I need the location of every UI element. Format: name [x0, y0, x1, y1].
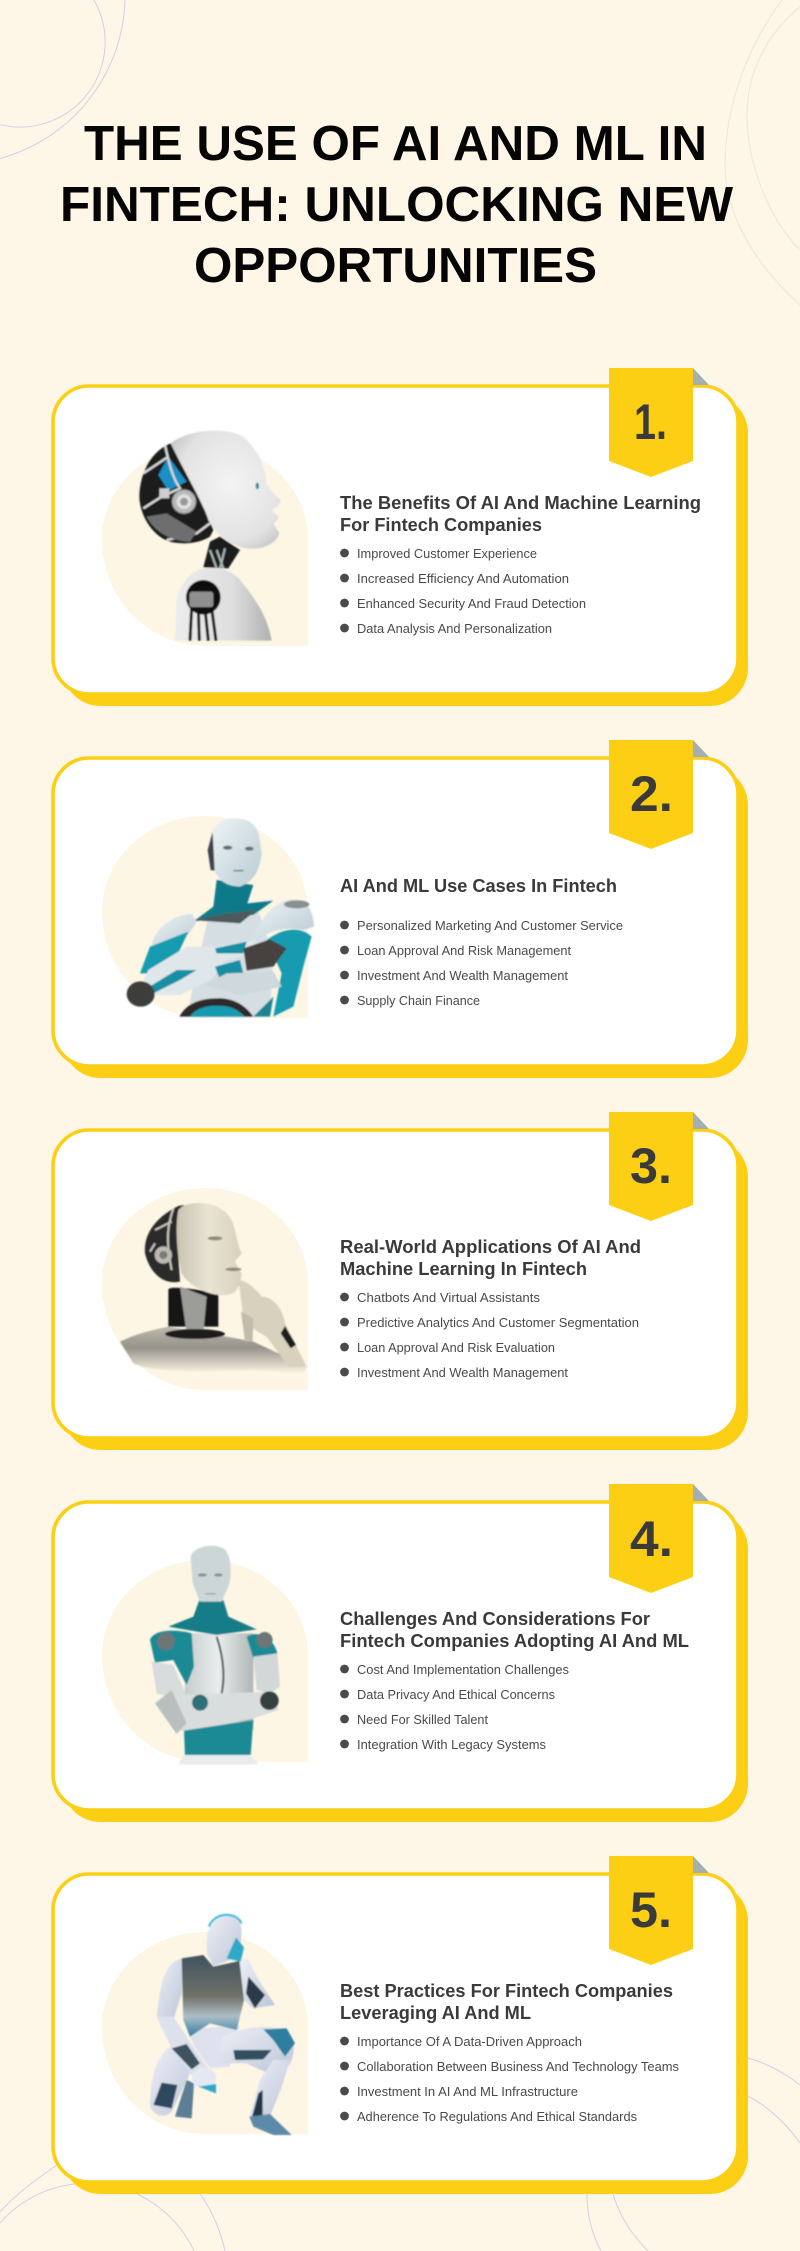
card 1 bullet list: [340, 546, 586, 636]
card 5 crouching robot: [150, 1915, 295, 2135]
robot hand: [155, 1690, 187, 1734]
robot left shin and foot: [175, 2080, 194, 2118]
card 4 frame: [53, 1502, 738, 1810]
robot wrist guard: [172, 2044, 200, 2069]
robot shoulder cap: [284, 900, 309, 908]
robot upper forearm: [142, 940, 257, 995]
card 5 image backdrop: [102, 1932, 308, 2134]
card 1 heading: [340, 493, 701, 535]
card 2 heading: AI And ML Use Cases In Fintech: [340, 876, 617, 896]
robot face: [171, 431, 281, 549]
robot left upper arm: [157, 1958, 183, 2020]
card 5 number: 5.: [630, 1882, 672, 1938]
robot finger joints: [241, 1312, 253, 1342]
robot neck: [168, 1288, 218, 1327]
robot wrist strip: [281, 1326, 296, 1348]
robot shoulders: [120, 1327, 307, 1373]
robot chest: [182, 1955, 244, 2037]
card 1 bullet list: Enhanced Security And Fraud Detection: [357, 596, 586, 611]
card 2 shadow: [62, 767, 748, 1078]
robot collar: [165, 1329, 225, 1339]
robot left upper arm: [152, 1662, 187, 1697]
robot left leg: [150, 2047, 192, 2116]
card 2 robot arms crossed: [127, 818, 314, 1017]
robot blue circuit: [158, 457, 187, 491]
robot neck: [203, 537, 240, 568]
robot face details: [198, 1573, 223, 1594]
card 2 frame: [53, 758, 738, 1066]
robot neck cylinder: [180, 1287, 207, 1333]
robot head: [191, 1546, 231, 1602]
robot face: [177, 1203, 242, 1295]
title: OPPORTUNITIES: [194, 239, 597, 293]
card 4 heading: Challenges And Considerations For: [340, 1609, 650, 1629]
card 1 image backdrop: [102, 444, 308, 646]
robot eye and lips: [208, 1236, 241, 1271]
decorative arcs: bottom: [0, 2058, 800, 2251]
decorative arcs: top left: [0, 0, 125, 158]
panel: card 3 applications: [53, 1112, 748, 1450]
card 5 ribbon: [609, 1856, 693, 1965]
title: FINTECH: UNLOCKING NEW: [60, 178, 734, 232]
robot wrist: [192, 1695, 208, 1711]
robot neck and traps: [168, 1600, 257, 1635]
card 4 bullet list: Integration With Legacy Systems: [357, 1737, 546, 1752]
card 4 shadow: [62, 1511, 748, 1822]
card 4 bullet list: Cost And Implementation Challenges: [357, 1662, 569, 1677]
card 1 number: 1.: [634, 394, 667, 450]
card 1 bullet list: Improved Customer Experience: [357, 546, 537, 561]
robot hip: [178, 1755, 258, 1764]
robot right shoulder: [247, 1634, 277, 1658]
card 1 heading: The Benefits Of AI And Machine Learning: [340, 493, 701, 513]
robot eyes and mouth: [223, 846, 254, 871]
robot chest: [187, 907, 273, 1017]
robot shin dark stripe: [252, 2090, 263, 2118]
robot knee plate: [263, 2028, 295, 2057]
card 5 heading: [340, 1981, 673, 2023]
panel: card 5 best practices: [53, 1856, 748, 2194]
robot eye: [256, 483, 259, 489]
robot ear: [208, 832, 215, 871]
card 3 bullet list: Predictive Analytics And Customer Segmentation: [357, 1315, 639, 1330]
card 4 standing robot: [150, 1546, 280, 1764]
card 3 number: 3.: [630, 1138, 672, 1194]
robot arm guard: [246, 1977, 265, 2008]
card 1 robot child: [139, 431, 281, 641]
robot right fist: [243, 939, 287, 971]
panel: card 2 use cases: [53, 740, 748, 1078]
robot teal upper arm: [267, 930, 312, 1017]
robot left fist: [127, 981, 155, 1007]
card 5 heading: Leveraging AI And ML: [340, 2003, 531, 2023]
card 3 bullet list: [340, 1290, 639, 1380]
robot face hand: [227, 1937, 244, 1962]
robot fingers: [198, 2084, 216, 2093]
robot teal left arm: [140, 932, 188, 973]
robot head plates: [150, 1208, 173, 1270]
card 4 number: 4.: [630, 1511, 673, 1567]
card 1 shadow: [62, 395, 748, 706]
robot right foot: [249, 2114, 292, 2135]
card 3 bullet list: Loan Approval And Risk Evaluation: [357, 1340, 555, 1355]
robot right upper arm: [253, 1653, 280, 1693]
card 3 bullet list: Chatbots And Virtual Assistants: [357, 1290, 541, 1305]
title: [60, 117, 734, 293]
robot thigh dark stripe: [233, 2050, 272, 2060]
card 4 bullet list: [340, 1662, 569, 1752]
robot head back: [139, 443, 213, 543]
robot neck cables: [193, 880, 273, 922]
card 4 ribbon: [609, 1484, 693, 1593]
card 2 ribbon fold: [693, 740, 709, 757]
robot arm joint: [186, 580, 221, 641]
card 1 bullet list: Data Analysis And Personalization: [357, 621, 552, 636]
robot elbow: [260, 1691, 279, 1710]
decorative arcs: top right: [725, 0, 800, 305]
robot torso: [183, 1633, 253, 1730]
robot head plating: [143, 445, 210, 540]
robot head: [207, 1915, 241, 1966]
card 2 bullet list: Investment And Wealth Management: [357, 968, 568, 983]
card 5 bullet list: [340, 2034, 679, 2124]
robot ear gear: [159, 488, 196, 514]
robot head glow line: [209, 1915, 242, 1927]
card 1 frame: [53, 386, 738, 694]
card 3 heading: Real-World Applications Of AI And: [340, 1237, 641, 1257]
card 1 ribbon: [609, 368, 693, 477]
card 1 bullet list: Increased Efficiency And Automation: [357, 571, 569, 586]
robot ear gear: [155, 1246, 172, 1264]
card 1 ribbon fold: [693, 368, 709, 385]
robot right shoulder joint: [257, 1632, 273, 1648]
card 3 heading: Machine Learning In Fintech: [340, 1259, 587, 1279]
card 3 shadow: [62, 1139, 748, 1450]
robot forearm: [157, 2017, 212, 2082]
card 3 heading: [340, 1237, 641, 1279]
robot right shoulder: [253, 899, 314, 940]
card 5 bullet list: Investment In AI And ML Infrastructure: [357, 2084, 578, 2099]
card 5 bullet list: Collaboration Between Business And Technology Teams: [357, 2059, 679, 2074]
robot right arm: [239, 1958, 275, 2008]
robot forearm: [170, 1692, 278, 1732]
robot right shin: [250, 2060, 290, 2117]
robot hand: [238, 1280, 307, 1367]
card 2 bullet list: Personalized Marketing And Customer Service: [357, 918, 623, 933]
card 2 image backdrop: [102, 816, 308, 1018]
card 5 ribbon fold: [693, 1856, 709, 1873]
card 3 image backdrop: [102, 1188, 308, 1390]
robot hand: [192, 2068, 216, 2089]
card 2 ribbon: [609, 740, 693, 849]
card 2 bullet list: Supply Chain Finance: [357, 993, 480, 1008]
robot left shoulder joint: [157, 1633, 175, 1650]
card 2 number: 2.: [630, 766, 673, 822]
card 3 thinking robot: [120, 1203, 307, 1373]
card 3 frame: [53, 1130, 738, 1438]
robot lower torso: [184, 1720, 253, 1755]
card 2 bullet list: [340, 918, 623, 1008]
robot left shoulder: [150, 1631, 194, 1685]
card 1 heading: For Fintech Companies: [340, 515, 542, 535]
card 2 bullet list: Loan Approval And Risk Management: [357, 943, 571, 958]
card 5 bullet list: Adherence To Regulations And Ethical Standards: [357, 2109, 637, 2124]
robot teal forearm patches: [147, 942, 247, 993]
card 4 bullet list: Data Privacy And Ethical Concerns: [357, 1687, 555, 1702]
card 3 ribbon: [609, 1112, 693, 1221]
card 5 frame: [53, 1874, 738, 2182]
robot head lower plate: [147, 513, 197, 542]
card 4 image backdrop: [102, 1560, 308, 1762]
robot head: [213, 818, 262, 887]
card 4 bullet list: Need For Skilled Talent: [357, 1712, 488, 1727]
robot left shoulder: [152, 914, 197, 947]
card 3 bullet list: Investment And Wealth Management: [357, 1365, 568, 1380]
robot head back: [145, 1205, 184, 1282]
card 5 shadow: [62, 1883, 748, 2194]
robot pelvis: [187, 2025, 240, 2068]
robot right thigh: [217, 2027, 294, 2073]
card 5 bullet list: Importance Of A Data-Driven Approach: [357, 2034, 582, 2049]
card 5 heading: Best Practices For Fintech Companies: [340, 1981, 673, 2001]
robot shoulder: [175, 568, 272, 641]
card 4 heading: Fintech Companies Adopting AI And ML: [340, 1631, 689, 1651]
robot collar: [193, 910, 257, 923]
card 4 heading: [340, 1609, 689, 1651]
robot lower forearm: [203, 972, 282, 995]
card 4 ribbon fold: [693, 1484, 709, 1501]
robot bottom torso: [179, 997, 273, 1017]
panel: card 4 challenges: [53, 1484, 748, 1822]
title: THE USE OF AI AND ML IN: [84, 117, 707, 171]
card 3 ribbon fold: [693, 1112, 709, 1129]
panel: card 1 benefits: [53, 368, 748, 706]
robot left leg plate: [153, 2083, 177, 2108]
robot chest line: [217, 1637, 223, 1693]
